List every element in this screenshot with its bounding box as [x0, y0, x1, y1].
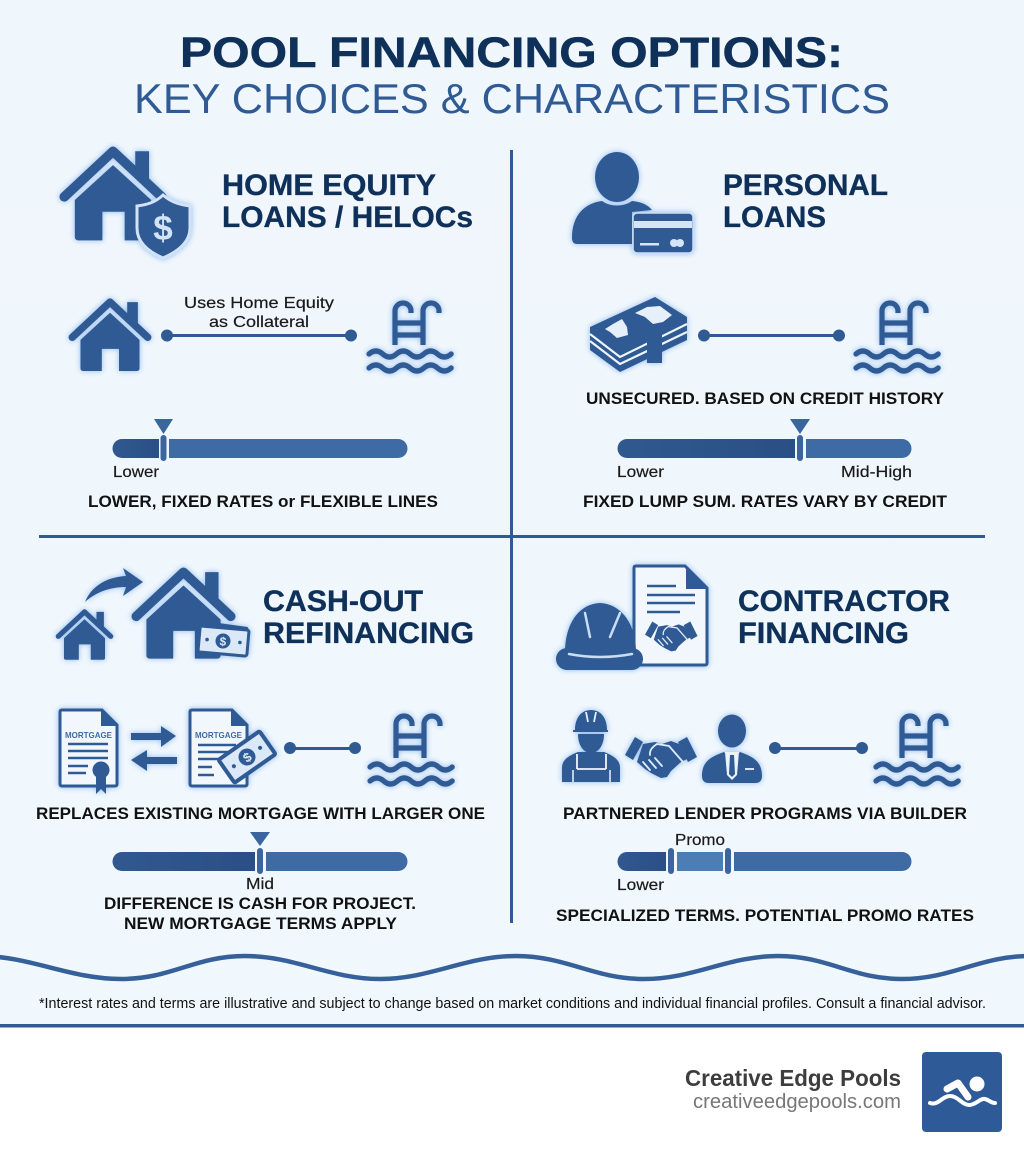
- icon: pool: [369, 303, 451, 371]
- title: POOL FINANCING OPTIONS:: [180, 29, 843, 77]
- icon: cash stack: [590, 297, 687, 372]
- icon: handshake: [625, 737, 697, 778]
- rate bar: [112, 832, 408, 874]
- caption: specialized terms: SPECIALIZED TERMS. POTENTIAL PROMO RATES: [556, 906, 974, 925]
- title: [134, 29, 890, 122]
- heading: CASH-OUT: [263, 585, 423, 618]
- icon: house with shield: $: [153, 209, 173, 248]
- icon: pool: [370, 716, 452, 784]
- connector: [161, 330, 357, 342]
- connector label: [184, 295, 334, 331]
- icon: mortgage document with seal: MORTGAGE: [65, 730, 112, 740]
- brand name: Creative Edge Pools: [685, 1065, 901, 1091]
- icon: contractor worker: [562, 710, 620, 782]
- footnote: *Interest rates and terms are illustrative and subject to change based on market conditions and individual financial profiles. Consult a financial advisor.: [39, 996, 986, 1012]
- icon: person with credit card: [572, 152, 693, 253]
- icon: helmet and contract: [556, 566, 707, 670]
- caption: difference is cash: NEW MORTGAGE TERMS APPLY: [124, 914, 398, 933]
- promo label: Promo: [675, 832, 725, 849]
- connector: [698, 330, 845, 342]
- icon: businessman: [702, 714, 762, 783]
- connector label: Uses Home Equity: [184, 295, 334, 312]
- caption: partnered lender: PARTNERED LENDER PROGRAMS VIA BUILDER: [563, 804, 967, 823]
- heading: LOANS / HELOCs: [222, 201, 473, 234]
- panel: contractor financing: [556, 566, 974, 925]
- connector: [769, 742, 868, 754]
- icon: pool: [856, 303, 938, 371]
- connector label: as Collateral: [209, 314, 309, 331]
- icon: mortgage document with cash: MORTGAGE: [195, 730, 242, 740]
- panel: home equity loans: [64, 151, 473, 511]
- heading: [723, 169, 888, 234]
- icon: mortgage document with seal: [60, 710, 117, 794]
- rate labels: [617, 464, 912, 481]
- rate bar: [618, 419, 912, 461]
- caption: replaces mortgage: REPLACES EXISTING MORTGAGE WITH LARGER ONE: [36, 804, 485, 823]
- caption: difference is cash: [104, 894, 416, 933]
- heading: HOME EQUITY: [222, 169, 436, 202]
- caption: difference is cash: DIFFERENCE IS CASH FOR PROJECT.: [104, 894, 416, 913]
- rate label: Lower: [617, 877, 665, 894]
- brand name: [685, 1065, 901, 1113]
- heading: [263, 585, 474, 650]
- title: KEY CHOICES & CHARACTERISTICS: [134, 75, 890, 122]
- panel: cash-out refinancing: [36, 568, 485, 933]
- heading: REFINANCING: [263, 617, 474, 650]
- rate labels: Lower: [617, 464, 665, 481]
- heading: CONTRACTOR: [738, 585, 950, 618]
- brand name: creativeedgepools.com: [693, 1091, 901, 1113]
- panel: personal loans: [572, 152, 948, 511]
- icon: mortgage document with cash: [190, 710, 276, 786]
- heading: [222, 169, 473, 234]
- heading: PERSONAL: [723, 169, 888, 202]
- rate label: Mid: [246, 876, 274, 893]
- rate bar: [112, 419, 408, 461]
- caption: LOWER, FIXED RATES or FLEXIBLE LINES: [88, 492, 438, 511]
- logo: swimmer: [922, 1052, 1002, 1132]
- caption: fixed lump sum: FIXED LUMP SUM. RATES VARY BY CREDIT: [583, 492, 948, 511]
- heading: FINANCING: [738, 617, 909, 650]
- icon: houses with arrow and cash: $: [219, 634, 227, 649]
- icon: mortgage document with cash: $: [240, 749, 255, 766]
- icon: houses with arrow and cash: [58, 568, 249, 660]
- rate labels: Mid-High: [841, 464, 912, 481]
- icon: small house: [72, 302, 148, 371]
- icon: pool: [876, 716, 958, 784]
- caption: unsecured: UNSECURED. BASED ON CREDIT HISTORY: [586, 389, 945, 408]
- connector: [284, 742, 361, 754]
- heading: LOANS: [723, 201, 826, 234]
- heading: [738, 585, 950, 650]
- rate label: Lower: [113, 464, 160, 481]
- icon: house with shield: [64, 151, 190, 258]
- icon: swap arrows: [131, 726, 177, 771]
- rate bar: [618, 848, 912, 874]
- wave divider: [0, 956, 1024, 979]
